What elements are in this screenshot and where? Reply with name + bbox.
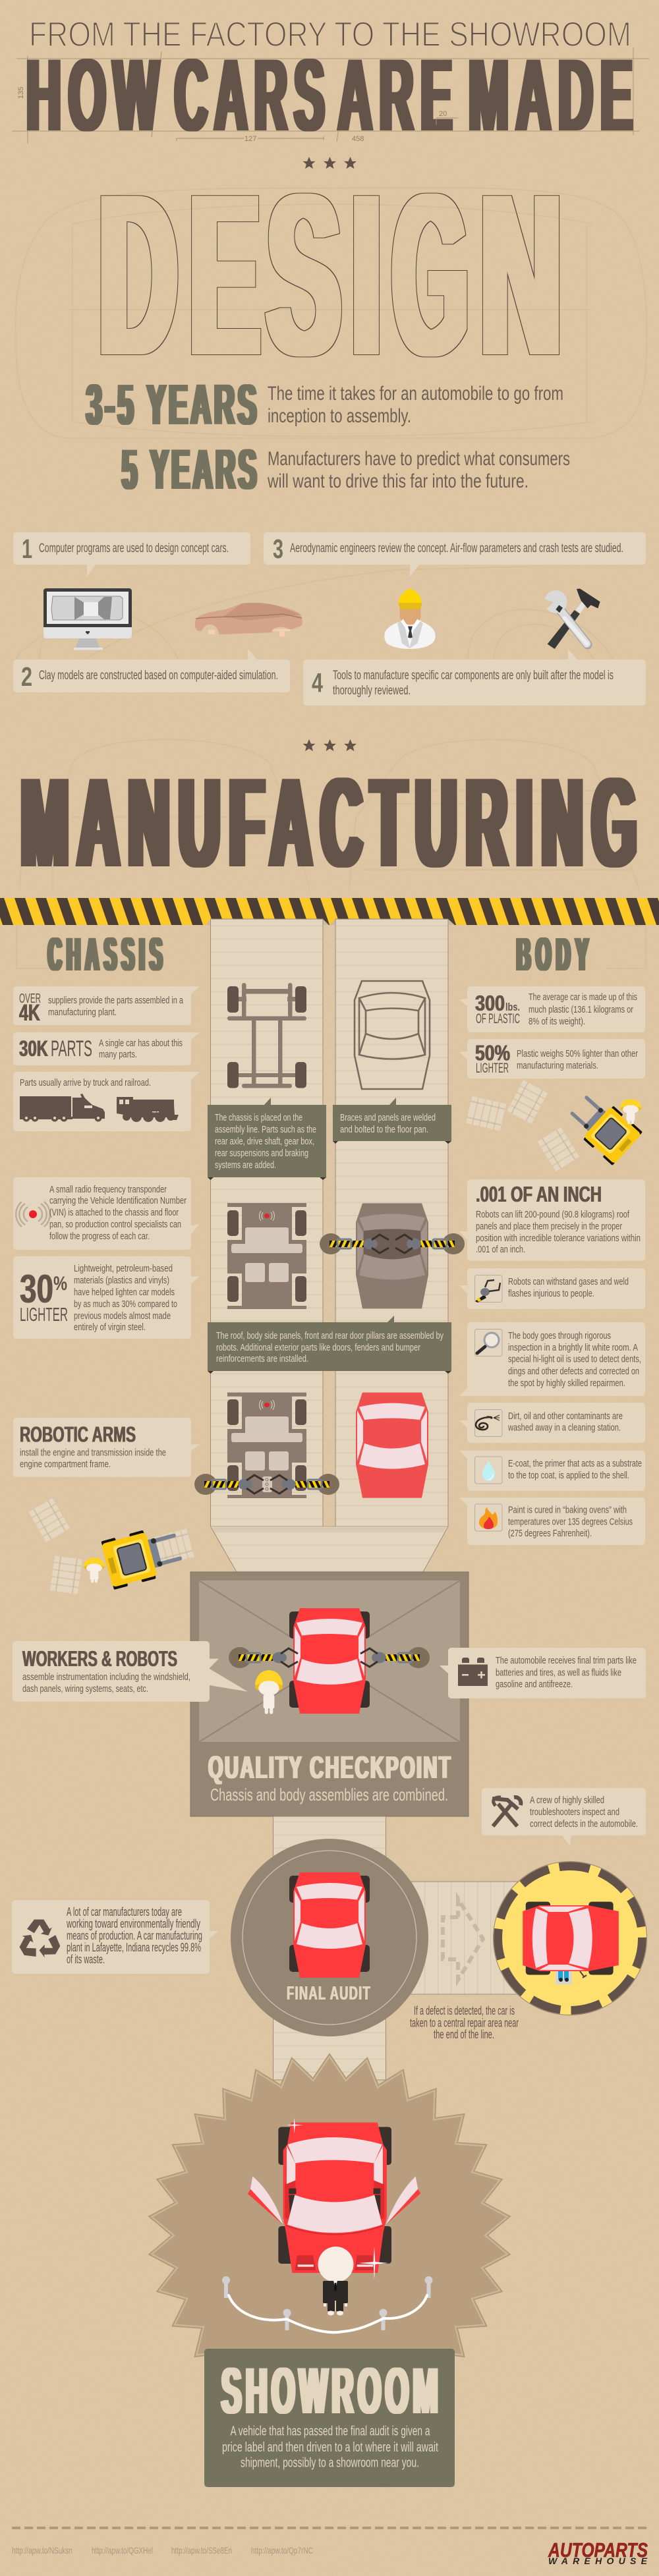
design step 1 callout xyxy=(13,532,250,576)
chassis callout: 4K suppliers: 4K xyxy=(19,1000,40,1026)
design step 4 callout: thoroughly reviewed. xyxy=(333,684,411,698)
chassis callout: 30% lighter: % xyxy=(53,1273,67,1295)
icon: clay car model xyxy=(195,603,302,636)
caption: braces and panels: and bolted to the floor pan. xyxy=(340,1125,428,1135)
stat: 5 years: will want to drive this far into the future. xyxy=(267,470,529,492)
heading: design (outlined): I xyxy=(352,146,381,404)
design step 2 callout: 2 xyxy=(21,661,32,692)
infographic canvas: N xyxy=(480,146,561,404)
dimension annotations on title: 135 xyxy=(17,87,25,99)
caption: roof and body side panels: robots. Additional exterior parts like doors, fenders and bumper xyxy=(216,1343,420,1353)
showroom salesman xyxy=(318,2247,353,2315)
icon: crossed hammer and wrench xyxy=(492,1797,521,1826)
body callout: 300 lbs of plastic: OF PLASTIC xyxy=(476,1011,520,1026)
source links: http://apw.to/Qp7rNC xyxy=(251,2545,313,2556)
callout: recycling: A lot of car manufacturers today are xyxy=(67,1905,182,1918)
body callout: e-coat xyxy=(459,1451,645,1491)
callout: workers and robots: WORKERS & ROBOTS xyxy=(22,1646,177,1671)
body callout: 50% lighter: 50% xyxy=(475,1041,510,1065)
chassis callout: 30% lighter xyxy=(13,1256,200,1339)
design step 4 callout xyxy=(303,649,646,706)
velvet rope barrier xyxy=(222,2276,432,2332)
icon: painted red body xyxy=(356,1393,428,1498)
dimension annotations on title: 127 xyxy=(244,135,256,143)
body callout: 300 lbs of plastic xyxy=(459,986,645,1032)
chassis callout: truck and railroad xyxy=(13,1072,200,1131)
chassis callout: VIN transponder: (VIN) is attached to the chassis and floor xyxy=(49,1208,179,1218)
robot arm left xyxy=(229,1647,298,1668)
body callout: 50% lighter: LIGHTER xyxy=(476,1061,509,1076)
caption: chassis placed on line xyxy=(208,1098,326,1180)
caption: chassis placed on line: rear axle, drive shaft, gear box, xyxy=(215,1136,314,1147)
chassis callout: 4K suppliers xyxy=(13,986,200,1026)
caption: roof and body side panels xyxy=(208,1316,451,1374)
icon: red car in final audit xyxy=(289,1872,370,1978)
callout: final trim parts: batteries and tires, as well as fluids like xyxy=(496,1668,621,1679)
design step 4 callout: 4 xyxy=(312,667,323,698)
body callout: cleaning station xyxy=(459,1403,645,1443)
dimension annotations on title xyxy=(17,87,458,143)
hazard stripe band xyxy=(0,898,659,925)
chassis callout: 30% lighter: entirely of virgin steel. xyxy=(74,1322,146,1333)
callout: robotic arms: ROBOTIC ARMS xyxy=(20,1422,136,1447)
callout: workers and robots: dash panels, wiring systems, seats, etc. xyxy=(22,1684,148,1694)
heading: quality checkpoint: QUALITY CHECKPOINT xyxy=(208,1750,452,1785)
showroom starburst xyxy=(146,2053,513,2418)
icon: chassis frame on belt xyxy=(227,983,306,1088)
design step 1 callout: Computer programs are used to design concept cars. xyxy=(39,542,229,555)
heading: design (outlined): D xyxy=(99,146,177,404)
panel: quality checkpoint xyxy=(190,1572,469,1816)
assembly line to showroom xyxy=(273,1816,386,2080)
heading: design (outlined): G xyxy=(393,146,468,404)
body callout: white room inspection: The body goes through rigorous xyxy=(508,1331,611,1341)
callout: workers and robots xyxy=(13,1641,248,1702)
body callout: cleaning station: washed away in a cleaning station. xyxy=(507,1423,621,1434)
chassis callout: 30% lighter: LIGHTER xyxy=(20,1304,68,1326)
source links: http://apw.to/QGXHel xyxy=(92,2545,153,2556)
body callout: 50% lighter xyxy=(459,1039,645,1078)
callout: recycling: means of production. A car manufacturing xyxy=(67,1929,202,1942)
label: final audit: FINAL AUDIT xyxy=(287,1983,371,2004)
chassis callout: 4K suppliers: suppliers provide the parts assembled in a xyxy=(48,995,184,1006)
callout: crew of troubleshooters xyxy=(482,1788,646,1846)
final audit station xyxy=(231,1839,428,2036)
body callout: 300 lbs of plastic: 8% of its weight). xyxy=(529,1017,585,1027)
showroom description: shipment, possibly to a showroom near you. xyxy=(241,2456,419,2471)
icon: wrench and hammer xyxy=(544,588,600,649)
subheading: Chassis and body assemblies are combined. xyxy=(210,1785,448,1805)
body callout: baking ovens: (275 degrees Fahrenheit). xyxy=(508,1528,592,1539)
repair turntable xyxy=(488,1856,652,2021)
repair side belt xyxy=(386,1882,517,1994)
dimension annotations on title: 458 xyxy=(352,135,364,143)
infographic canvas: CHASSIS xyxy=(48,929,167,981)
chassis callout: VIN transponder: pan, so production control specialists can xyxy=(49,1219,181,1230)
icon: magnifying glass xyxy=(474,1330,502,1356)
chassis callout: 30K parts: PARTS xyxy=(51,1036,92,1061)
callout: crew of troubleshooters: A crew of highly skilled xyxy=(530,1795,604,1806)
body callout: baking ovens: Paint is cured in “baking ovens” with xyxy=(508,1505,627,1515)
showroom red car with open doors xyxy=(248,2118,420,2280)
callout: robotic arms: install the engine and transmission inside the xyxy=(20,1448,166,1459)
body callout: baking ovens xyxy=(459,1498,645,1545)
assembly line: chassis and body belts xyxy=(206,919,455,1572)
body callout: 50% lighter: manufacturing materials. xyxy=(517,1061,598,1071)
caption: braces and panels xyxy=(333,1098,451,1144)
title: how cars are made: HOW xyxy=(26,38,166,153)
body callout: 300 lbs of plastic: 300 xyxy=(475,991,505,1015)
title: how cars are made: CARS xyxy=(175,38,331,153)
icon: locomotive xyxy=(117,1097,179,1122)
body callout: white room inspection xyxy=(459,1322,645,1396)
design step 2 callout: Clay models are constructed based on computer-aided simulation. xyxy=(39,669,278,683)
chassis callout: 30% lighter: Lightweight, petroleum-based xyxy=(74,1264,173,1274)
source links xyxy=(12,2545,313,2556)
chassis callout: VIN transponder: A small radio frequency transponder xyxy=(49,1185,167,1195)
callout: final trim parts: gasoline and antifreeze. xyxy=(496,1679,573,1690)
body callout: .001 of an inch: .001 OF AN INCH xyxy=(476,1182,602,1206)
chassis callout: VIN transponder xyxy=(13,1177,200,1250)
chassis callout: 30% lighter: 30 xyxy=(20,1267,53,1311)
repair area caption xyxy=(410,2004,519,2041)
heading: design (outlined) xyxy=(99,146,561,404)
icon: computer monitor with car xyxy=(43,588,132,650)
three stars divider xyxy=(303,157,357,169)
three stars divider xyxy=(303,739,357,751)
chassis callout: 30K parts: 30K xyxy=(19,1036,48,1061)
stat: 3-5 years: The time it takes for an automobile to go from xyxy=(268,383,563,405)
icon: water drop xyxy=(474,1457,502,1484)
chassis callout: 30% lighter: previous models almost made xyxy=(74,1311,171,1322)
stat: 3-5 years: 3-5 YEARS xyxy=(86,373,260,437)
icon: battery xyxy=(458,1658,488,1686)
chassis callout: 30% lighter: by as much as 30% compared to xyxy=(74,1299,177,1310)
caption: chassis placed on line: assembly line. Parts such as the xyxy=(215,1125,316,1135)
panel: showroom xyxy=(204,2349,455,2487)
design step 3 callout: 3 xyxy=(273,534,283,564)
icon: hose xyxy=(474,1410,502,1436)
icon: body shell with robot arms xyxy=(320,1203,465,1308)
chassis callout: 30K parts: many parts. xyxy=(99,1050,137,1060)
design step 2 callout xyxy=(13,649,290,692)
stat: 5 years xyxy=(122,438,570,501)
icon: truck xyxy=(20,1094,105,1121)
robot arm right xyxy=(360,1647,430,1668)
stat: 5 years: 5 YEARS xyxy=(122,438,260,501)
icon: body frame outline on belt xyxy=(355,981,430,1089)
icon: red car at checkpoint xyxy=(289,1608,370,1714)
callout: crew of troubleshooters: troubleshooters inspect and xyxy=(530,1807,619,1818)
icon: mechanic under car xyxy=(556,1970,587,1984)
callout: recycling: of its waste. xyxy=(67,1953,105,1966)
icon: forklift with pallets (left) xyxy=(28,1498,194,1594)
caption: roof and body side panels: reinforcements are installed. xyxy=(216,1354,308,1364)
design step 1 callout: 1 xyxy=(22,534,32,564)
body callout: withstand gases: flashes injurious to people. xyxy=(508,1289,594,1299)
body callout: 300 lbs of plastic: lbs. xyxy=(505,1001,520,1013)
heading: design (outlined): E xyxy=(190,146,260,404)
body callout: .001 of an inch: .001 of an inch. xyxy=(476,1245,525,1255)
icon: recycle symbol xyxy=(15,1920,64,1961)
callout: robotic arms xyxy=(13,1418,200,1477)
callout: recycling xyxy=(12,1900,218,1974)
title: how cars are made: ARE xyxy=(338,38,459,153)
chassis callout: 30K parts: A single car has about this xyxy=(99,1038,183,1049)
chassis callout: 30% lighter: materials (plastics and vinyls) xyxy=(74,1275,169,1286)
icon: red car on turntable xyxy=(523,1901,619,1975)
callout: recycling: working toward environmentally friendly xyxy=(66,1917,200,1930)
showroom description: price label and then driven to a lot where it will await xyxy=(222,2440,438,2455)
source links: http://apw.to/NSuksn xyxy=(12,2545,72,2556)
callout: workers and robots: assemble instrumentation including the windshield, xyxy=(22,1672,190,1683)
dashed repair arrow xyxy=(443,1899,483,1980)
caption: braces and panels: Braces and panels are welded xyxy=(340,1113,436,1123)
heading: design (outlined): S xyxy=(267,146,341,404)
icon: engineer with hard hat xyxy=(384,588,436,649)
logo: autoparts warehouse: WAREHOUSE xyxy=(548,2556,648,2566)
chassis callout: 30% lighter: have helped lighten car models xyxy=(74,1287,175,1298)
icon: flame xyxy=(474,1504,502,1531)
callout: recycling: plant in Lafayette, Indiana recycles 99.8% xyxy=(67,1941,201,1954)
repair area caption: If a defect is detected, the car is xyxy=(414,2004,515,2017)
chassis callout: 4K suppliers: OVER xyxy=(19,992,41,1006)
repair area caption: taken to a central repair area near xyxy=(410,2016,519,2029)
body callout: cleaning station: Dirt, oil and other contaminants are xyxy=(508,1411,623,1422)
chassis callout: VIN transponder: follow the progress of each car. xyxy=(49,1231,150,1242)
caption: chassis placed on line: systems are added. xyxy=(215,1160,276,1171)
chassis callout: 30K parts xyxy=(13,1032,200,1065)
body callout: white room inspection: the spot by highly skilled repairmen. xyxy=(508,1378,625,1389)
design step 3 callout xyxy=(264,532,646,576)
dimension annotations on title: 20 xyxy=(439,110,447,118)
source links: http://apw.to/SSe8En xyxy=(171,2545,232,2556)
caption: chassis placed on line: The chassis is placed on the xyxy=(215,1113,302,1123)
icon: worker in hard hat xyxy=(255,1670,283,1714)
icon: third floor pan with robot arms xyxy=(194,1393,339,1498)
icon: transponder signal xyxy=(16,1202,50,1227)
showroom description: A vehicle that has passed the final audit is given a xyxy=(231,2424,430,2439)
callout: robotic arms: engine compartment frame. xyxy=(20,1459,111,1470)
stat: 3-5 years: inception to assembly. xyxy=(268,405,411,427)
callout: final trim parts xyxy=(440,1648,646,1698)
icon: forklift with pallets (right) xyxy=(466,1080,643,1171)
caption: roof and body side panels: The roof, body side panels, front and rear door pillars are assembled by xyxy=(216,1331,444,1341)
repair area caption: the end of the line. xyxy=(434,2028,494,2041)
body callout: .001 of an inch xyxy=(459,1179,645,1261)
caption: chassis placed on line: rear suspensions and braking xyxy=(215,1148,308,1159)
chassis callout: VIN transponder: carrying the Vehicle Identification Number xyxy=(49,1196,186,1206)
showroom description xyxy=(222,2424,438,2471)
chassis callout: truck and railroad: Parts usually arrive by truck and railroad. xyxy=(20,1078,151,1088)
chassis callout: 4K suppliers: manufacturing plant. xyxy=(48,1007,117,1018)
title: how cars are made xyxy=(12,38,649,153)
icon: floor pan with transponder xyxy=(227,1203,306,1309)
body callout: withstand gases xyxy=(459,1268,645,1309)
icon: robot claw xyxy=(474,1275,502,1302)
